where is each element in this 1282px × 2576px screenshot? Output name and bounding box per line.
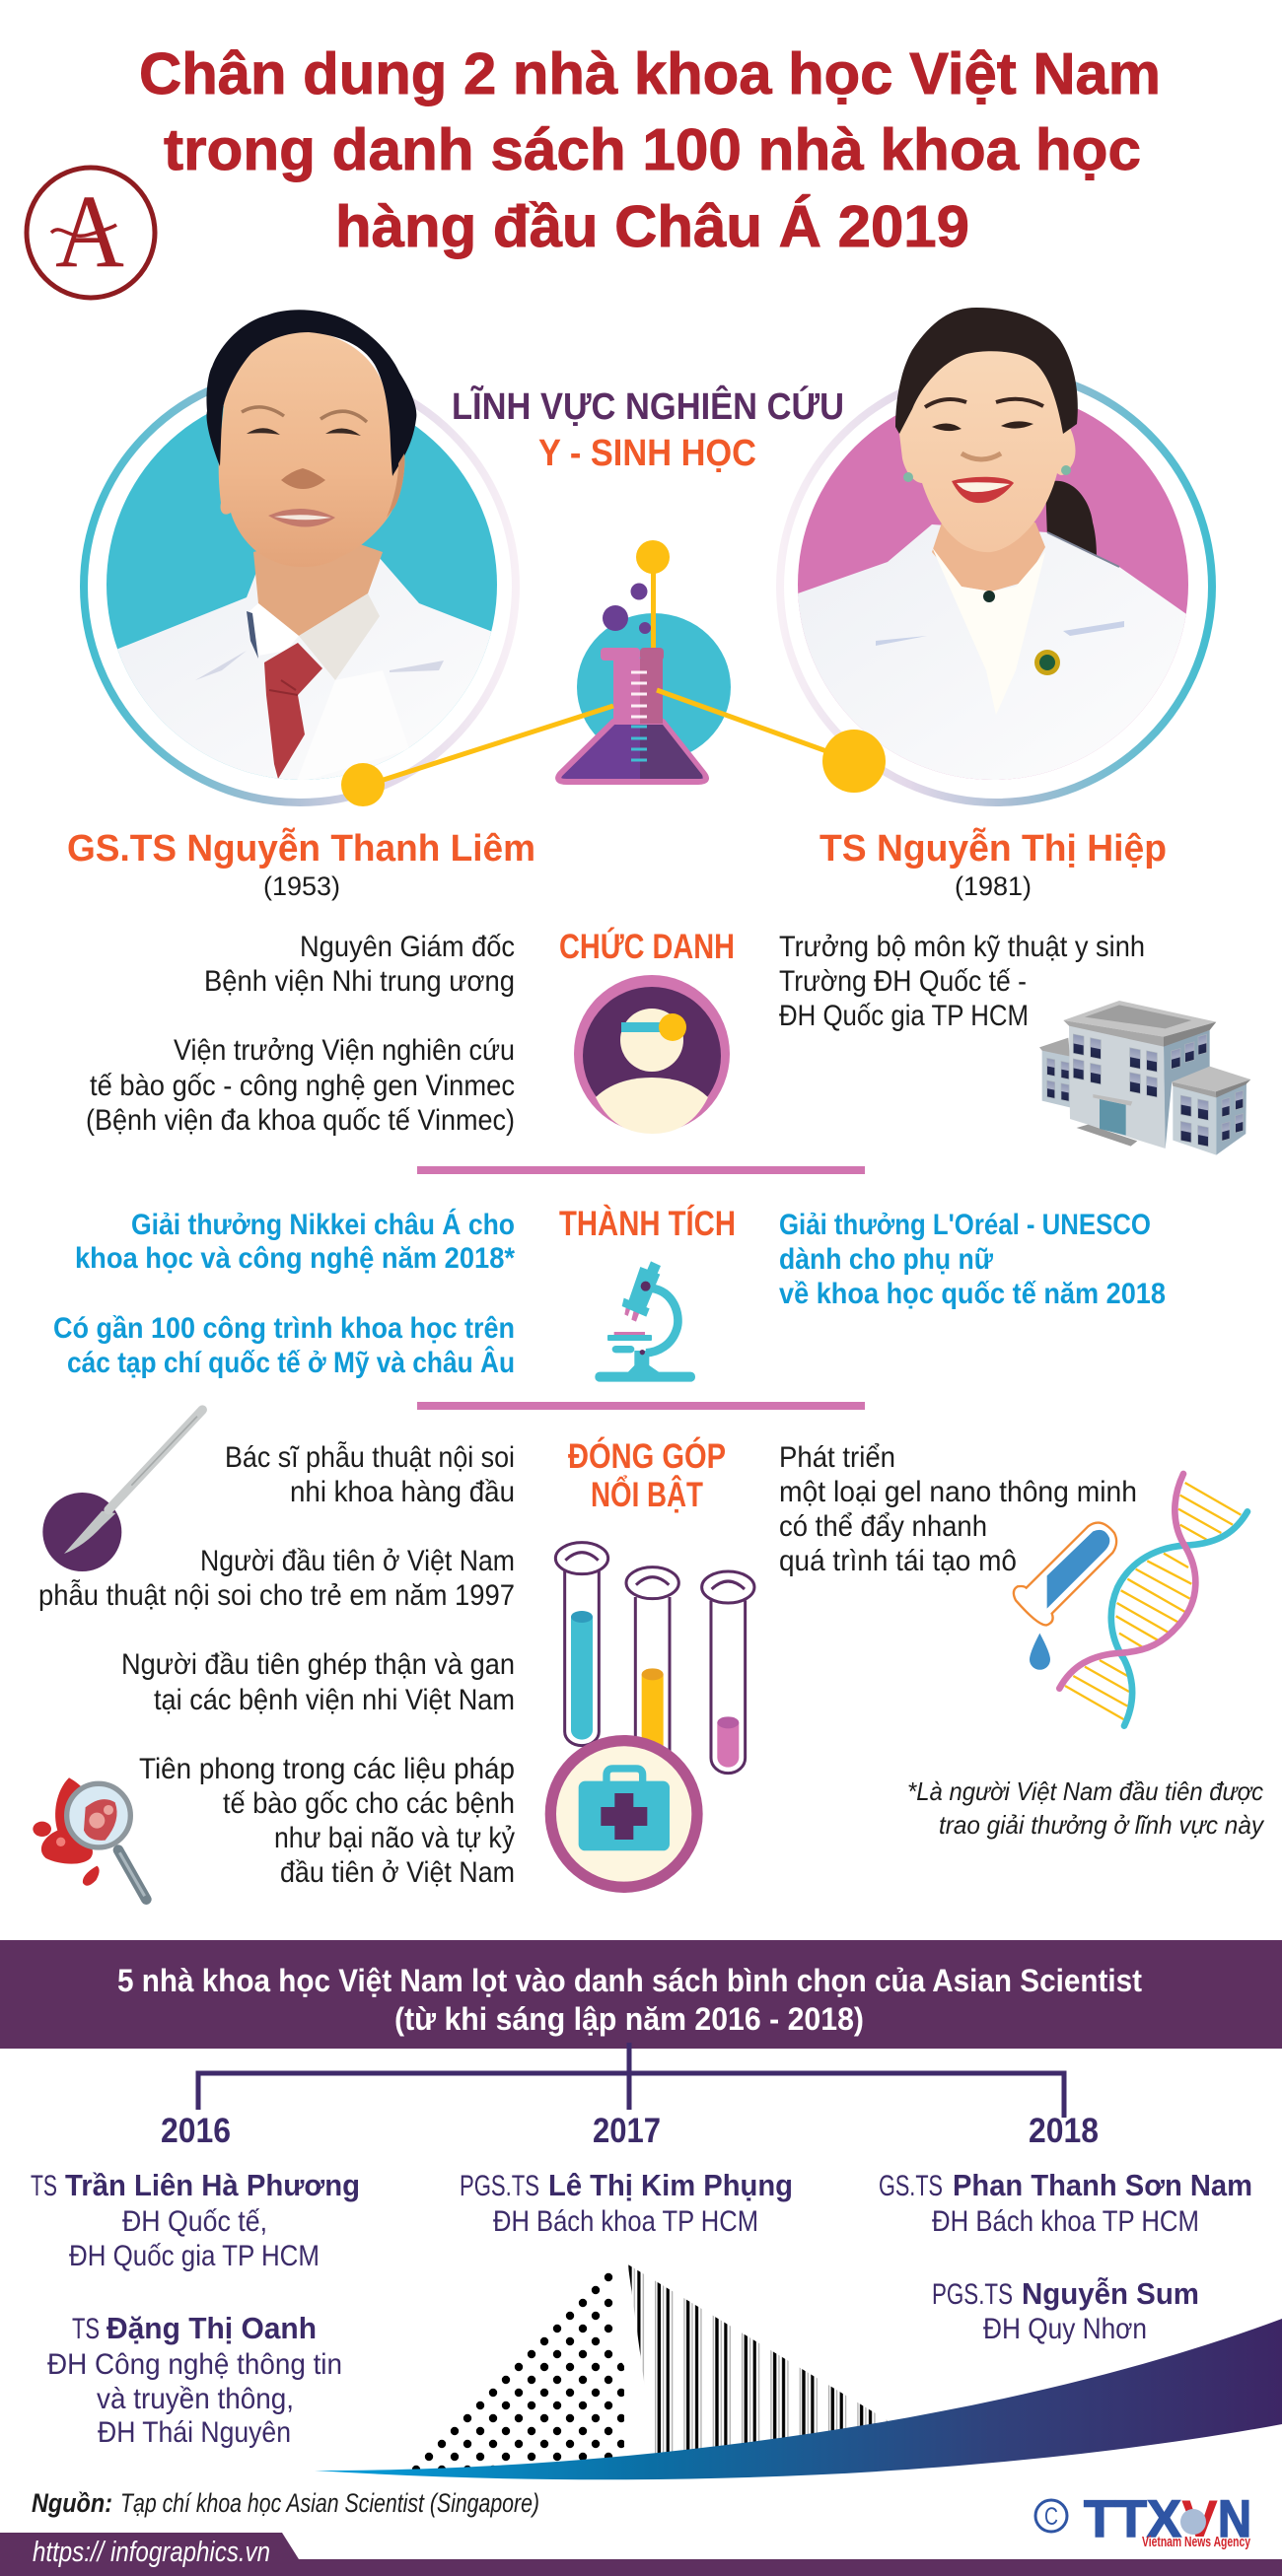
face details [242,407,404,527]
tube with pink liquid [702,1571,754,1774]
column: 2016: Đặng Thị Oanh [107,2311,317,2345]
heading: position: CHỨC DANH [559,927,735,966]
column: 2017: PGS.TS [460,2170,539,2202]
logo: TTXVN: TTX [1084,2490,1181,2548]
position text left: Bệnh viện Nhi trung ương [204,965,515,998]
heading: contributions: ĐÓNG GÓP [568,1436,726,1476]
column: 2017: Lê Thị Kim Phụng [548,2168,793,2202]
column: 2016: ĐH Quốc tế, [122,2205,267,2238]
contributions text left: Tiên phong trong các liệu pháp [139,1753,515,1785]
heading: achievements: THÀNH TÍCH [559,1204,736,1243]
footer bar [0,2533,1282,2576]
heading: research field: Y - SINH HỌC [538,433,756,474]
contributions text right: quá trình tái tạo mô [779,1545,1017,1577]
contributions text left: tại các bệnh viện nhi Việt Nam [154,1684,515,1716]
icon: gel pipette and DNA [1014,1474,1247,1726]
logo: TTXVN: V [1181,2490,1218,2548]
column: 2016: ĐH Quốc gia TP HCM [69,2240,320,2272]
contributions text left: Người đầu tiên ở Việt Nam [200,1545,515,1577]
position text right: ĐH Quốc gia TP HCM [779,1000,1029,1032]
stripe triangle [628,2264,890,2470]
contributions text left: Bác sĩ phẫu thuật nội soi [225,1441,515,1474]
achievements text left: Có gần 100 công trình khoa học trên [53,1312,515,1345]
icon: blood under magnifier [33,1777,146,1900]
column: 2016: TS [31,2170,57,2202]
footer bar: https:// infographics.vn [33,2537,270,2568]
column: 2018: Phan Thanh Sơn Nam [953,2168,1252,2202]
icon: microscope [595,1261,695,1382]
column: 2018: Nguyễn Sum [1022,2276,1199,2311]
position text right: Trưởng bộ môn kỹ thuật y sinh [779,931,1145,963]
face details [903,399,1071,503]
achievements text left [53,1208,515,1379]
timeline connector [198,2043,1064,2118]
DNA rungs [1065,1483,1241,1719]
contributions text right: một loại gel nano thông minh [779,1476,1137,1508]
logo: TTXVN: C [1044,2503,1058,2531]
pipette [1014,1523,1116,1625]
column: 2017 [460,2112,793,2238]
divider [417,1166,865,1174]
heading: contributions: NỔI BẬT [591,1475,703,1514]
connector lines [341,690,886,806]
name right: TS Nguyễn Thị Hiệp [819,826,1167,870]
column: 2018: ĐH Quy Nhơn [983,2313,1147,2345]
column: 2018: GS.TS [879,2170,943,2202]
title: Chân dung 2 nhà khoa học Việt Nam [139,41,1161,106]
contributions text left: nhi khoa hàng đầu [290,1476,515,1508]
column: 2016: và truyền thông, [97,2383,294,2415]
name right: (1981) [955,871,1032,901]
tube with blue liquid [555,1543,608,1746]
column: 2017: 2017 [593,2112,661,2150]
column: 2018: PGS.TS [932,2278,1013,2311]
logo: TTXVN [1035,2490,1251,2550]
position text left [86,931,515,1137]
position text left: (Bệnh viện đa khoa quốc tế Vinmec) [86,1104,515,1137]
divider [417,1402,865,1410]
position text left: tế bào gốc - công nghệ gen Vinmec [90,1070,515,1102]
name right [819,826,1167,901]
heading: research field: LĨNH VỰC NGHIÊN CỨU [452,384,844,428]
contributions text left: đầu tiên ở Việt Nam [280,1856,515,1889]
achievements text right [779,1209,1166,1310]
column: 2016: ĐH Thái Nguyên [98,2416,291,2449]
source: Nguồn: [32,2488,112,2518]
name left: GS.TS Nguyễn Thanh Liêm [67,826,535,870]
column: 2018: ĐH Bách khoa TP HCM [932,2205,1199,2238]
position text right: Trường ĐH Quốc tế - [779,965,1027,998]
column: 2016: 2016 [161,2112,231,2150]
contributions text left: tế bào gốc cho các bệnh [223,1787,515,1820]
icon: flask [341,540,886,806]
logo: letter A in circle [27,168,155,298]
contributions text left: như bại não và tự kỷ [274,1822,515,1854]
logo: TTXVN: N [1218,2490,1251,2548]
achievements text left: các tạp chí quốc tế ở Mỹ và châu Âu [67,1346,515,1379]
contributions text left: phẫu thuật nội soi cho trẻ em năm 1997 [38,1579,515,1612]
column: 2016 [31,2112,360,2449]
column: 2018 [879,2112,1252,2345]
icon: scalpel [42,1410,202,1571]
contributions text right: Phát triển [779,1441,895,1474]
title: trong danh sách 100 nhà khoa học [164,117,1141,182]
position text left: Nguyên Giám đốc [300,931,515,963]
source [32,2488,539,2518]
icon: building [1039,1001,1250,1155]
achievements text right: về khoa học quốc tế năm 2018 [779,1278,1166,1310]
column: 2017: ĐH Bách khoa TP HCM [493,2205,758,2238]
position text right [779,931,1145,1032]
name left: (1953) [263,871,340,901]
logo: letter A in circle: A [55,174,124,289]
band: shortlist heading: 5 nhà khoa học Việt Nam lọt vào danh sách bình chọn của Asian Scientist [117,1963,1142,1998]
footnote: trao giải thưởng ở lĩnh vực này [939,1810,1265,1840]
contributions text right: có thể đẩy nhanh [779,1510,987,1543]
icon: test tubes and medical kit [545,1543,754,1893]
column: 2016: TS [72,2313,100,2345]
footnote [907,1776,1265,1840]
tube with yellow liquid [626,1567,678,1755]
contributions text left: Người đầu tiên ghép thận và gan [121,1648,515,1681]
column: 2018: 2018 [1029,2112,1099,2150]
title [139,41,1161,259]
name left [67,826,535,901]
swoosh [315,2319,1282,2479]
icon: doctor [574,975,730,1134]
achievements text left: Giải thưởng Nikkei châu Á cho [131,1208,515,1241]
heading: contributions [568,1436,726,1514]
portrait: GS.TS Nguyễn Thanh Liêm [84,310,516,802]
achievements text left: khoa học và công nghệ năm 2018* [75,1242,515,1275]
medical kit badge [545,1735,703,1893]
band: shortlist heading [0,1940,1282,2049]
portrait: TS Nguyễn Thị Hiệp [780,308,1212,802]
band: shortlist heading: (từ khi sáng lập năm 2016 - 2018) [394,2001,864,2037]
halftone dots [404,2271,624,2472]
title: hàng đầu Châu Á 2019 [335,194,969,259]
heading: research field [452,384,844,474]
contributions text right [779,1441,1137,1577]
source: Tạp chí khoa học Asian Scientist (Singapore) [120,2488,539,2518]
achievements text right: Giải thưởng L'Oréal - UNESCO [779,1209,1151,1241]
column: 2016: Trần Liên Hà Phương [65,2168,360,2202]
contributions text left [38,1441,515,1889]
position text left: Viện trưởng Viện nghiên cứu [174,1034,515,1067]
column: 2016: ĐH Công nghệ thông tin [47,2348,342,2381]
achievements text right: dành cho phụ nữ [779,1243,994,1276]
